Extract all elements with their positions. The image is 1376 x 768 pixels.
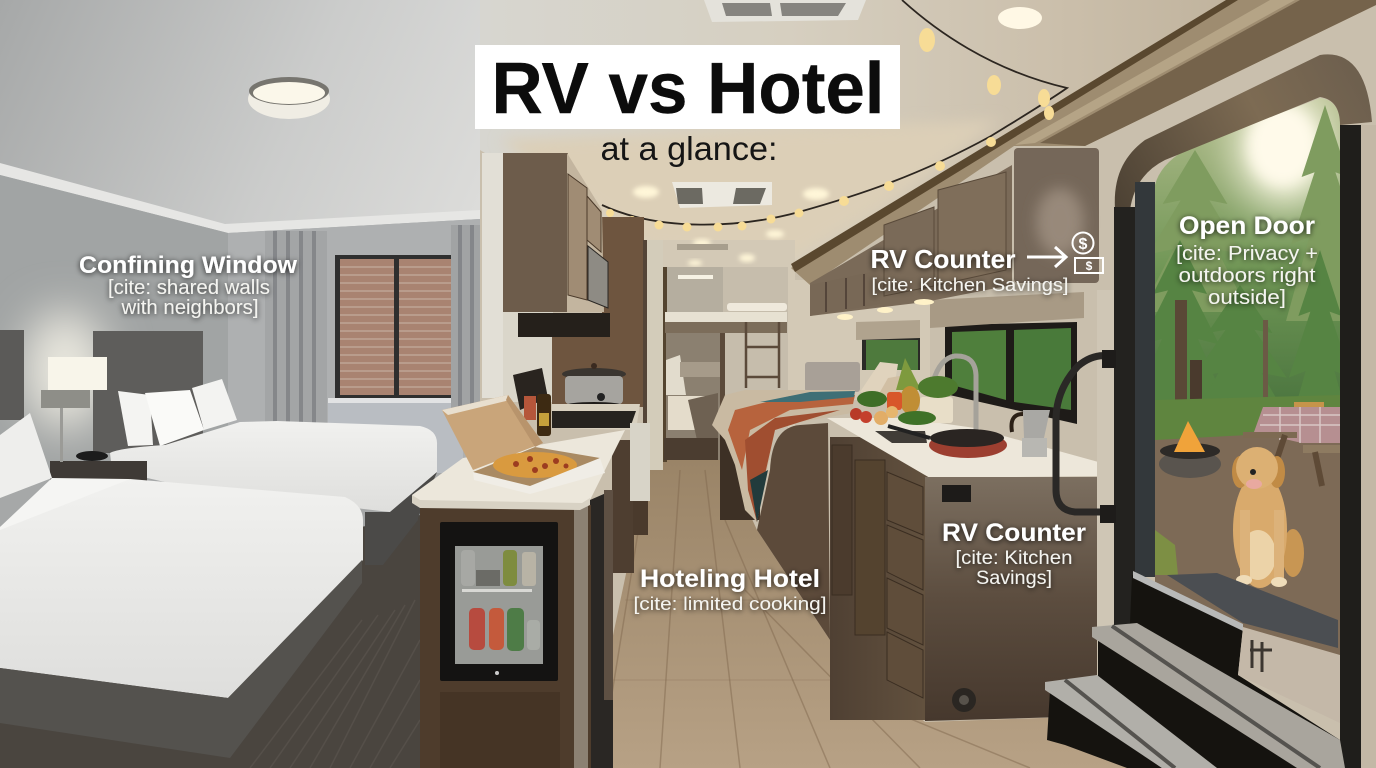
label: hoteling hotel <box>634 565 826 614</box>
label: open door <box>1176 212 1318 309</box>
bunk beds <box>663 267 788 462</box>
label: confining window: [cite: shared walls <box>108 277 270 299</box>
stove and back counter <box>513 368 640 436</box>
kitchen island <box>412 430 625 768</box>
title box: RV vs Hotel <box>492 49 884 129</box>
ceiling and wall moulding <box>791 0 1376 285</box>
golden retriever <box>1232 447 1304 588</box>
label: confining window <box>79 252 297 319</box>
mini fridge <box>440 522 558 681</box>
label: RV counter upper: RV Counter <box>870 244 1016 274</box>
label: confining window: Confining Window <box>79 252 297 279</box>
label: RV counter upper <box>870 244 1068 295</box>
label: open door: outdoors right <box>1178 265 1316 287</box>
door exterior forest view <box>1155 98 1340 655</box>
window with brick view <box>328 255 460 403</box>
door steps and threshold <box>1045 571 1345 768</box>
icon: money savings <box>1072 232 1103 273</box>
label: RV counter lower: RV Counter <box>942 519 1086 547</box>
far hotel bed <box>93 331 437 565</box>
subtitle: at a glance: <box>600 130 778 167</box>
curtains <box>265 225 482 423</box>
door frame <box>1097 54 1376 768</box>
label: confining window: with neighbors] <box>120 297 258 319</box>
upper cabinets right <box>810 148 1099 320</box>
grab handle <box>1056 350 1116 523</box>
slow cooker <box>562 363 626 410</box>
string lights <box>602 0 1067 232</box>
label: open door: Open Door <box>1179 212 1315 240</box>
towel and oven side <box>590 423 650 768</box>
label: RV counter lower: Savings] <box>976 568 1052 589</box>
left upper cabinets and microwave <box>482 153 663 470</box>
hotel room background <box>0 0 500 768</box>
kitchen counter with sink, pans and faucet <box>827 356 1102 720</box>
RV interior shell <box>480 0 1376 768</box>
fruit, plant and pineapple on counter <box>850 358 958 425</box>
RV ceiling vents and lights <box>633 0 1042 266</box>
RV window over kitchen <box>856 292 1084 424</box>
near hotel bed <box>0 413 363 758</box>
island lower drawer <box>440 692 560 768</box>
label: RV counter lower <box>942 519 1086 589</box>
ceiling light <box>248 77 330 119</box>
icon: money savings: $ <box>1086 259 1093 273</box>
picnic table <box>1243 402 1340 486</box>
label: RV counter lower: [cite: Kitchen <box>956 548 1072 569</box>
nightstand, lamp and phone <box>0 330 147 481</box>
label: open door: outside] <box>1208 287 1286 309</box>
RV bed with colourful blanket <box>712 362 860 640</box>
door mat <box>1167 573 1338 648</box>
icon: money savings: $ <box>1079 236 1088 253</box>
wood floor <box>585 460 1135 768</box>
label: open door: [cite: Privacy + <box>1176 243 1318 265</box>
arrow to savings icon <box>1027 247 1066 267</box>
campfire <box>1159 421 1221 478</box>
label: RV counter upper: [cite: Kitchen Savings] <box>872 275 1068 295</box>
lower kitchen cabinets <box>832 445 1097 721</box>
label: hoteling hotel: [cite: limited cooking] <box>634 594 826 614</box>
label: hoteling hotel: Hoteling Hotel <box>640 565 820 593</box>
pizza box with pizza <box>442 395 605 494</box>
